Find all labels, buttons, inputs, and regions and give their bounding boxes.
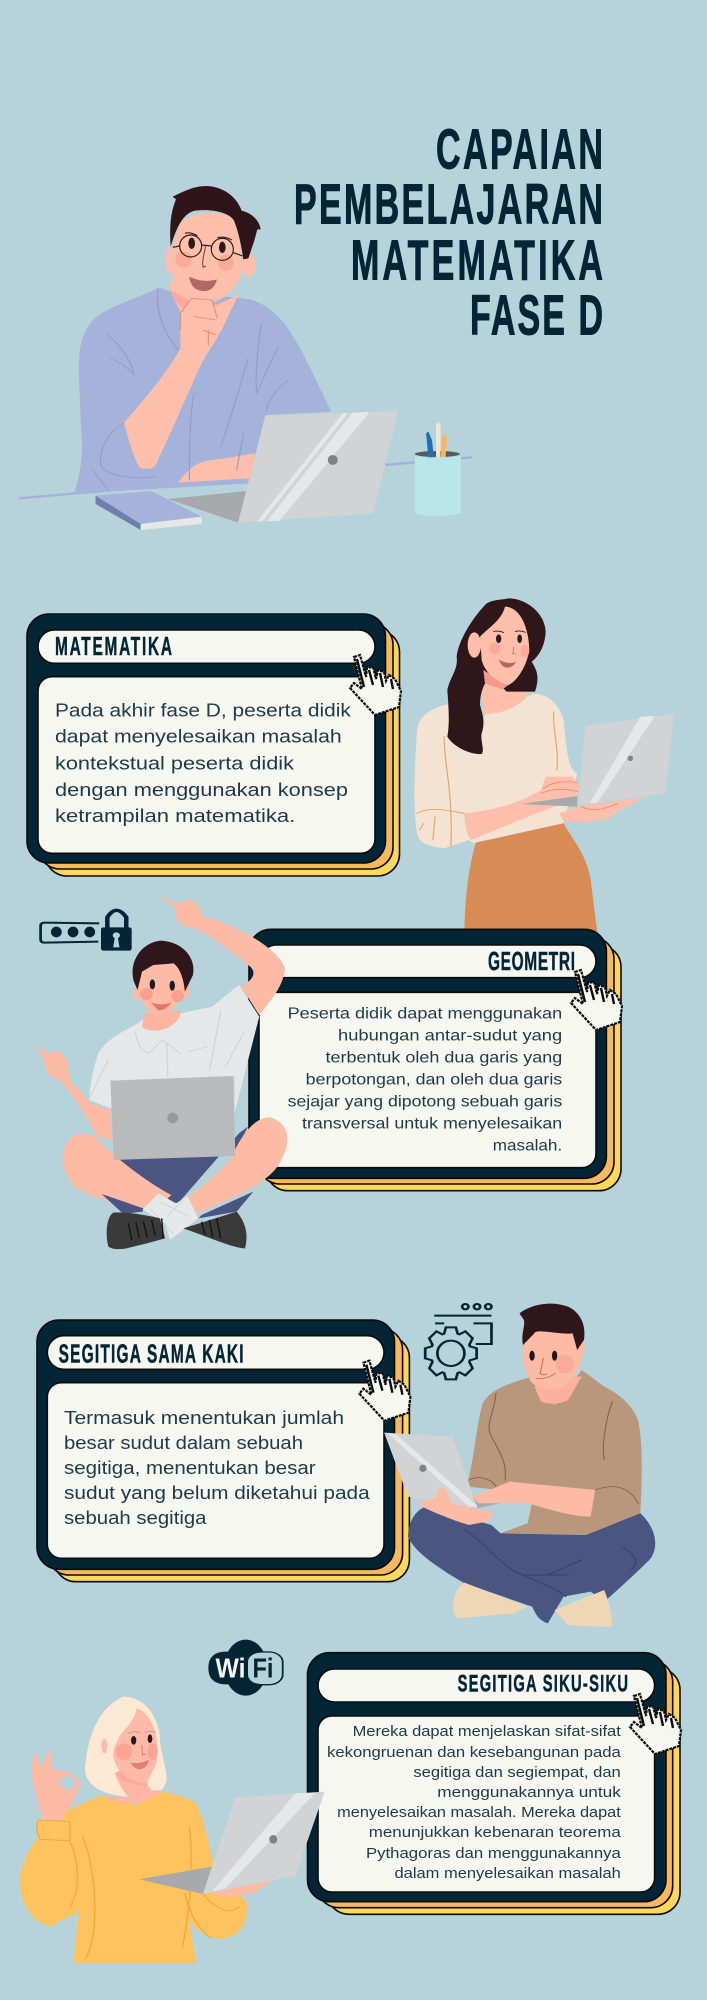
body box <box>47 1383 384 1558</box>
body text <box>55 700 352 826</box>
body text: dengan menggunakan konsep <box>55 779 348 800</box>
body text: hubungan antar-sudut yang <box>338 1027 562 1044</box>
illustration: woman with laptop <box>414 598 674 933</box>
body text: Pythagoras dan menggunakannya <box>366 1845 621 1862</box>
heading pill <box>38 630 375 663</box>
body text <box>327 1723 622 1882</box>
body text: sudut yang belum diketahui pada <box>64 1482 371 1503</box>
icon: wifi: Wi <box>216 1653 246 1684</box>
icon: pointer hand <box>630 1694 681 1754</box>
body text: terbentuk oleh dua garis yang <box>326 1049 562 1066</box>
panel: geometri <box>249 929 622 1191</box>
body text <box>288 1005 562 1154</box>
body text: menggunakannya untuk <box>437 1784 621 1801</box>
icon: gear and window <box>425 1304 491 1379</box>
body text: transversal untuk menyelesaikan <box>302 1115 562 1132</box>
body text: segitiga, menentukan besar <box>64 1457 316 1478</box>
heading pill <box>47 1336 384 1369</box>
illustration: boy sitting with laptop <box>36 896 287 1249</box>
body text: sejajar yang dipotong sebuah garis <box>288 1093 562 1110</box>
body text: sebuah segitiga <box>64 1507 207 1528</box>
body text: Peserta didik dapat menggunakan <box>288 1005 562 1022</box>
body box <box>38 677 375 853</box>
body text: berpotongan, dan oleh dua garis <box>306 1071 562 1088</box>
body text: menunjukkan kebenaran teorema <box>369 1824 621 1841</box>
body text: menyelesaikan masalah. Mereka dapat <box>337 1804 622 1821</box>
body text <box>64 1407 371 1528</box>
title <box>294 117 603 346</box>
illustration: blonde woman with laptop <box>20 1697 325 1963</box>
heading: matematika: MATEMATIKA <box>55 633 172 661</box>
body box <box>259 992 596 1168</box>
heading pill <box>260 945 596 978</box>
heading: segitiga siku-siku: SEGITIGA SIKU-SIKU <box>458 1671 628 1698</box>
body text: masalah. <box>493 1137 562 1154</box>
body box <box>318 1716 655 1892</box>
body text: kekongruenan dan kesebangunan pada <box>327 1744 621 1761</box>
illustration: man sitting cross-legged <box>384 1304 655 1627</box>
illustration: man with glasses at desk <box>19 186 472 530</box>
body text: besar sudut dalam sebuah <box>64 1432 303 1453</box>
icon: pointer hand <box>350 655 401 715</box>
panel: matematika <box>27 614 401 876</box>
panel: segitiga sama kaki <box>37 1320 410 1582</box>
body text: segitiga dan segiempat, dan <box>413 1764 621 1781</box>
heading: segitiga sama kaki: SEGITIGA SAMA KAKI <box>59 1341 244 1369</box>
heading: geometri: GEOMETRI <box>488 948 575 976</box>
body text: dapat menyelesaikan masalah <box>55 726 342 747</box>
icon: password and padlock <box>41 910 132 951</box>
title: PEMBELAJARAN <box>294 172 603 235</box>
card layers <box>308 1653 680 1914</box>
icon: pointer hand <box>571 970 622 1030</box>
title: MATEMATIKA <box>351 228 603 291</box>
icon: wifi: Fi <box>252 1653 274 1684</box>
body text: Pada akhir fase D, peserta didik <box>55 700 352 721</box>
card layers <box>249 929 621 1191</box>
icon: wifi <box>208 1640 283 1696</box>
body text: ketrampilan matematika. <box>55 805 295 826</box>
card layers <box>27 614 400 876</box>
body text: Termasuk menentukan jumlah <box>64 1407 344 1428</box>
icon: pointer hand <box>359 1361 410 1421</box>
heading pill <box>318 1669 655 1702</box>
body text: dalam menyelesaikan masalah <box>394 1865 621 1882</box>
title: FASE D <box>470 283 603 346</box>
panel: segitiga siku-siku <box>308 1653 681 1914</box>
card layers <box>37 1320 409 1582</box>
title: CAPAIAN <box>436 117 603 180</box>
body text: Mereka dapat menjelaskan sifat-sifat <box>353 1723 622 1740</box>
body text: kontekstual peserta didik <box>55 752 295 773</box>
